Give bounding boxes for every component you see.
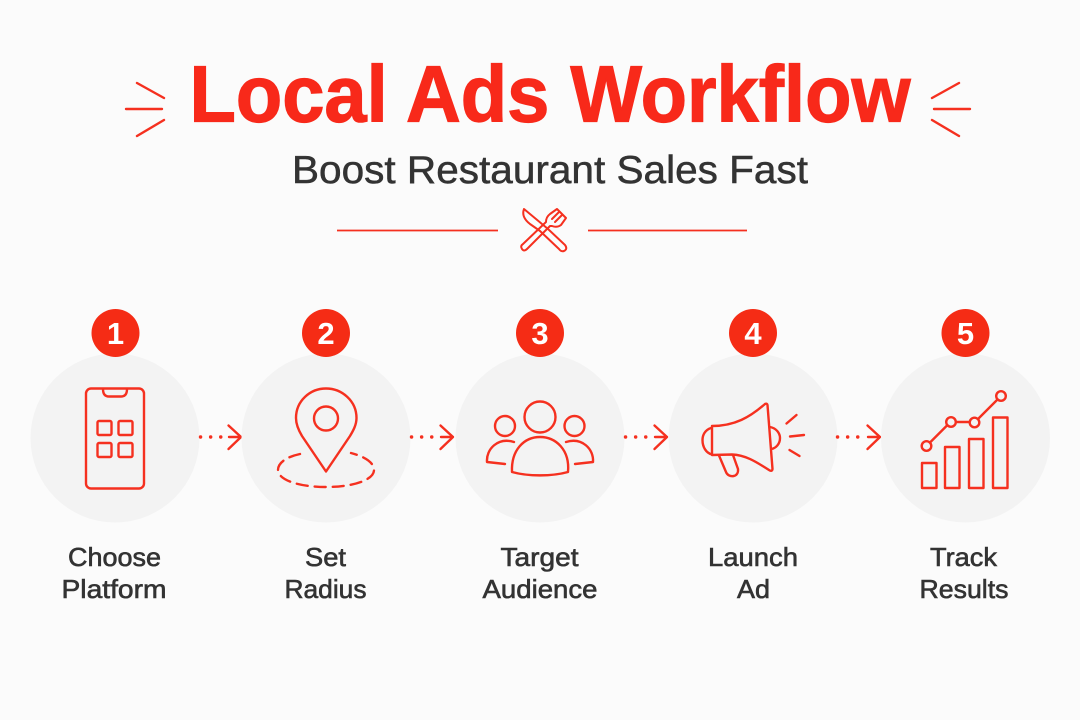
label: set radius: Set (305, 542, 347, 572)
badge 2: 2 (317, 316, 335, 351)
step 1: choose platform (30, 309, 200, 604)
label: choose platform: Platform (62, 574, 166, 604)
badge 3: 3 (531, 316, 549, 351)
title: Local Ads Workflow (190, 50, 911, 138)
label: launch ad: Ad (737, 574, 770, 604)
label: target audience: Audience (482, 574, 598, 604)
badge 1: 1 (107, 316, 124, 351)
badge 4: 4 (744, 316, 762, 351)
label: set radius: Radius (284, 574, 366, 604)
badge 1 (92, 309, 140, 357)
arrow 1 to 2 (200, 426, 241, 449)
badge 3 (516, 309, 564, 357)
decorative burst right of title (932, 83, 970, 136)
subtitle: Boost Restaurant Sales Fast (292, 149, 808, 192)
icon: map pin with dashed radius (278, 388, 374, 487)
icon: knife and fork (521, 209, 566, 251)
label: target audience (482, 542, 598, 604)
label: launch ad (708, 542, 798, 604)
icon: smartphone with app grid (86, 388, 144, 488)
step 4: launch ad (668, 309, 838, 604)
decorative burst left of title (126, 83, 164, 136)
label: choose platform (62, 542, 166, 604)
label: track results: Results (920, 574, 1008, 604)
step 2: set radius (242, 309, 410, 604)
icon: rising bar chart with trend line (922, 391, 1008, 488)
arrow 2 to 3 (412, 426, 453, 449)
step 3: target audience (456, 309, 624, 604)
badge 4 (729, 309, 777, 357)
badge 5: 5 (957, 316, 974, 351)
step 5: track results (881, 309, 1050, 604)
icon: group of people (487, 402, 593, 475)
label: choose platform: Choose (68, 542, 161, 572)
label: track results (920, 542, 1008, 604)
icon: megaphone (702, 404, 804, 476)
label: target audience: Target (500, 542, 579, 572)
badge 5 (942, 309, 990, 357)
arrow 4 to 5 (838, 426, 880, 449)
label: track results: Track (930, 542, 998, 572)
badge 2 (302, 309, 350, 357)
arrow 3 to 4 (626, 426, 667, 449)
label: set radius (284, 542, 366, 604)
divider with crossed knife and fork icon (337, 209, 747, 251)
label: launch ad: Launch (708, 542, 798, 572)
